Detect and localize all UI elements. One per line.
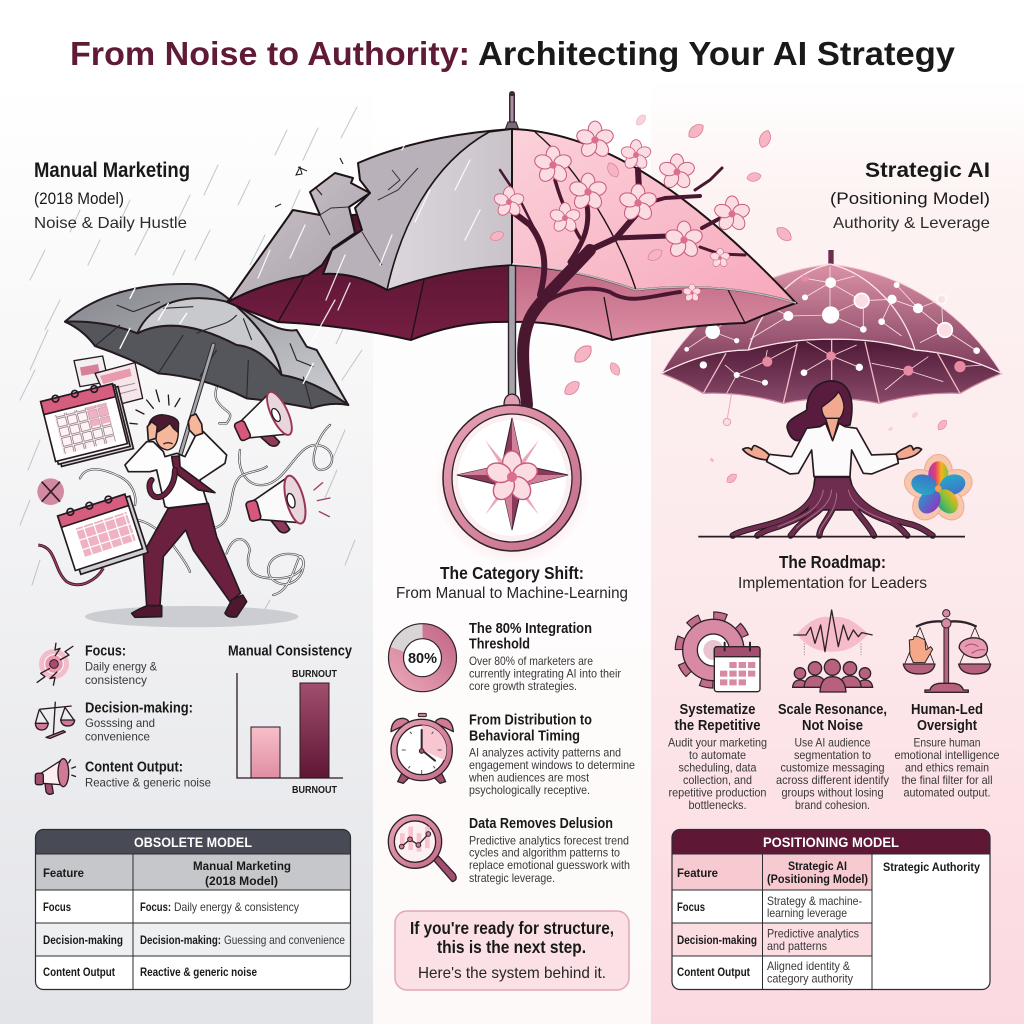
icon: magnifier with chart bbox=[388, 815, 456, 882]
table: obsolete model: Guessing and convenience bbox=[224, 933, 345, 947]
heading: the category shift: The Category Shift: bbox=[440, 563, 584, 583]
table: positioning model: Feature bbox=[677, 866, 718, 880]
column: scale resonance: segmentation to bbox=[794, 748, 871, 762]
text: 80% integration threshold: core growth strategies. bbox=[469, 679, 577, 693]
cherry tree bbox=[500, 168, 745, 405]
left block: Content Output item bbox=[35, 759, 211, 794]
icon: megaphone small bbox=[35, 759, 76, 794]
column: systematize the repetitive: collection, and bbox=[683, 773, 752, 787]
text: 80% integration threshold: Over 80% of marketers are bbox=[469, 654, 593, 668]
left block: Content Output item: Reactive & generic noise bbox=[85, 776, 211, 790]
text: 80% integration threshold: The 80% Integration bbox=[469, 621, 592, 637]
column: systematize the repetitive: scheduling, data bbox=[678, 761, 757, 775]
cherry blossoms bbox=[493, 121, 751, 302]
bar chart: manual consistency bbox=[228, 644, 352, 796]
table: obsolete model: Focus: bbox=[140, 900, 171, 914]
left block: Focus item: Focus: bbox=[85, 644, 126, 660]
heading: strategic AI bbox=[830, 159, 990, 232]
table: positioning model: Strategy & machine- bbox=[767, 894, 862, 908]
column: systematize the repetitive: Systematize bbox=[680, 702, 756, 718]
rain streaks bbox=[20, 107, 362, 614]
icon: alarm clock bbox=[391, 713, 453, 783]
text: data removes delusion: strategic leverage. bbox=[469, 871, 555, 885]
callout: next step: If you're ready for structure, bbox=[410, 918, 614, 938]
table: obsolete model: Content Output bbox=[43, 965, 115, 979]
heading: the roadmap bbox=[738, 552, 927, 592]
column: systematize the repetitive: to automate bbox=[689, 748, 746, 762]
callout: next step: Here's the system behind it. bbox=[418, 965, 606, 982]
text: from distribution to behavioral timing: psychologically receptive. bbox=[469, 783, 590, 797]
left block: Decision-making item: Gosssing and bbox=[85, 716, 155, 730]
icon: focus lightning target bbox=[37, 643, 73, 686]
column: scale resonance: Scale Resonance, bbox=[778, 702, 887, 718]
left block: Decision-making item: convenience bbox=[85, 730, 150, 744]
column: human-led oversight: Ensure human bbox=[914, 736, 980, 750]
table: positioning model: Strategic AI bbox=[788, 859, 847, 873]
left block: Focus item: Daily energy & bbox=[85, 660, 157, 674]
column: scale resonance: brand cohesion. bbox=[795, 798, 870, 812]
wires bbox=[38, 350, 332, 595]
table: positioning model: learning leverage bbox=[767, 906, 847, 920]
illustration: calm woman under network umbrella bbox=[662, 250, 1002, 537]
table: positioning model: Predictive analytics bbox=[767, 927, 859, 941]
heading: manual marketing bbox=[34, 159, 190, 232]
callout: next step bbox=[395, 911, 629, 990]
column: systematize the repetitive: Audit your marketing bbox=[668, 736, 767, 750]
table: obsolete model: OBSOLETE MODEL bbox=[134, 834, 252, 850]
column: human-led oversight: and ethics remain bbox=[905, 761, 989, 775]
text: data removes delusion: replace emotional guesswork with bbox=[469, 858, 630, 872]
heading: manual marketing: (2018 Model) bbox=[34, 189, 124, 208]
table: positioning model: and patterns bbox=[767, 939, 827, 953]
table: positioning model: Aligned identity & bbox=[767, 959, 850, 973]
heading: manual marketing: Manual Marketing bbox=[34, 159, 190, 182]
table: obsolete model: Decision-making bbox=[43, 933, 123, 947]
umbrella: grey broken bbox=[65, 284, 348, 408]
title: Architecting Your AI Strategy bbox=[478, 35, 956, 72]
panel: left background bbox=[0, 80, 373, 1024]
umbrella underside bbox=[227, 200, 796, 340]
column: human-led oversight: emotional intelligence bbox=[894, 748, 1000, 762]
text: 80% integration threshold bbox=[469, 621, 621, 693]
umbrella canopy: grey half bbox=[228, 129, 512, 345]
heading: strategic AI: Authority & Leverage bbox=[833, 215, 990, 232]
panel: centre background bbox=[373, 80, 651, 1024]
table: obsolete model: Reactive & generic noise bbox=[140, 965, 257, 979]
left block: Focus item: consistency bbox=[85, 673, 147, 687]
text: 80% integration threshold: currently integrating AI into their bbox=[469, 667, 621, 681]
column: scale resonance: Use AI audience bbox=[794, 736, 871, 750]
table: positioning model: Strategic Authority bbox=[883, 860, 980, 874]
calendar: top bbox=[40, 380, 133, 468]
table: positioning model: POSITIONING MODEL bbox=[763, 834, 899, 850]
calendar: bottom bbox=[57, 490, 148, 576]
bar chart: manual consistency: BURNOUT bbox=[292, 668, 337, 680]
table: obsolete model: Manual Marketing bbox=[193, 859, 291, 873]
text: from distribution to behavioral timing: Behavioral Timing bbox=[469, 729, 580, 745]
text: data removes delusion: Data Removes Delusion bbox=[469, 816, 613, 832]
umbrella canopy: pink half bbox=[512, 129, 796, 303]
table: positioning model: Content Output bbox=[677, 965, 750, 979]
heading: strategic AI: Strategic AI bbox=[865, 159, 990, 182]
illustration: stressed man under broken umbrella bbox=[37, 284, 348, 627]
left block: Decision-making item: Decision-making: bbox=[85, 700, 193, 716]
left block: Focus item bbox=[37, 643, 157, 687]
column: human-led oversight: Oversight bbox=[917, 718, 977, 734]
column: systematize the repetitive: repetitive production bbox=[668, 786, 766, 800]
column: scale resonance: Not Noise bbox=[802, 718, 863, 734]
bar: burnout bbox=[300, 683, 329, 778]
icon: 80% donut bbox=[388, 624, 456, 692]
icon: waveform and audience bbox=[793, 610, 873, 692]
heading: strategic AI: (Positioning Model) bbox=[830, 189, 990, 208]
icon: 80% donut: 80% bbox=[408, 650, 437, 667]
column: systematize the repetitive: bottlenecks. bbox=[688, 798, 746, 812]
skirt roots bbox=[733, 477, 933, 536]
heading: the roadmap: The Roadmap: bbox=[779, 552, 886, 572]
heading: the roadmap: Implementation for Leaders bbox=[738, 575, 927, 592]
column: human-led oversight bbox=[894, 702, 1000, 800]
text: from distribution to behavioral timing: From Distribution to bbox=[469, 713, 592, 729]
text: data removes delusion bbox=[469, 816, 630, 885]
table: positioning model bbox=[672, 830, 990, 990]
bar: light bbox=[251, 727, 280, 778]
icon: rainbow sakura flower bbox=[901, 454, 976, 526]
heading: the category shift: From Manual to Machine-Learning bbox=[396, 585, 628, 602]
column: scale resonance bbox=[776, 702, 889, 812]
text: 80% integration threshold: Threshold bbox=[469, 637, 530, 653]
icon: megaphone upper bbox=[228, 389, 299, 458]
table: obsolete model: Feature bbox=[43, 866, 84, 880]
text: from distribution to behavioral timing: when audiences are most bbox=[468, 771, 590, 785]
callout: next step: this is the next step. bbox=[437, 937, 586, 957]
icon: megaphone lower bbox=[242, 474, 311, 541]
falling petals bbox=[710, 411, 949, 485]
title: From Noise to Authority: bbox=[70, 35, 470, 72]
pole and ferrule bbox=[505, 94, 519, 402]
text: from distribution to behavioral timing: AI analyzes activity patterns and bbox=[469, 746, 621, 760]
table: obsolete model: (2018 Model) bbox=[205, 874, 278, 888]
illustration: central umbrella, half broken, half blossoming bbox=[227, 94, 796, 564]
icon: crossed circle bbox=[37, 478, 64, 505]
column: human-led oversight: the final filter for all bbox=[902, 773, 992, 787]
table: obsolete model: Daily energy & consistency bbox=[174, 900, 299, 914]
table: obsolete model bbox=[36, 830, 350, 990]
umbrella: network bbox=[662, 250, 1002, 426]
icon: balance with hand and brain bbox=[903, 610, 991, 692]
table: obsolete model: Decision-making: bbox=[140, 933, 221, 947]
column: systematize the repetitive: the Repetitive bbox=[674, 718, 760, 734]
column: scale resonance: groups without losing bbox=[782, 786, 884, 800]
icon: gear and calendar bbox=[681, 618, 760, 692]
column: scale resonance: across different identify bbox=[776, 773, 889, 787]
woman figure bbox=[698, 381, 965, 537]
column: scale resonance: customize messaging bbox=[780, 761, 884, 775]
text: from distribution to behavioral timing bbox=[468, 713, 635, 797]
pole and hook handle bbox=[177, 345, 213, 467]
heading: the category shift bbox=[396, 563, 628, 602]
panel: right background bbox=[651, 80, 1024, 1024]
text: data removes delusion: Predictive analytics forecest trend bbox=[469, 834, 629, 848]
left block: Content Output item: Content Output: bbox=[85, 760, 183, 776]
table: positioning model: Decision-making bbox=[677, 933, 757, 947]
column: human-led oversight: Human-Led bbox=[911, 702, 983, 718]
title bbox=[70, 35, 956, 72]
falling petals bbox=[489, 113, 794, 398]
text: from distribution to behavioral timing: engagement windows to determine bbox=[469, 758, 635, 772]
icon: balance scales bbox=[35, 702, 75, 738]
man figure bbox=[125, 390, 247, 617]
compass bbox=[434, 394, 590, 564]
table: positioning model: (Positioning Model) bbox=[767, 872, 868, 886]
bar chart: manual consistency: Manual Consistency bbox=[228, 644, 352, 660]
heading: manual marketing: Noise & Daily Hustle bbox=[34, 215, 187, 232]
column: systematize the repetitive bbox=[668, 702, 767, 812]
table: positioning model: category authority bbox=[767, 972, 853, 986]
table: obsolete model: Focus bbox=[43, 900, 71, 914]
table: positioning model: Focus bbox=[677, 900, 705, 914]
text: data removes delusion: cycles and algorithm patterns to bbox=[469, 846, 620, 860]
column: human-led oversight: automated output. bbox=[904, 786, 990, 800]
bar chart: manual consistency: BURNOUT bbox=[292, 784, 337, 796]
loose documents bbox=[74, 356, 143, 407]
left block: Decision-making item bbox=[35, 700, 193, 744]
